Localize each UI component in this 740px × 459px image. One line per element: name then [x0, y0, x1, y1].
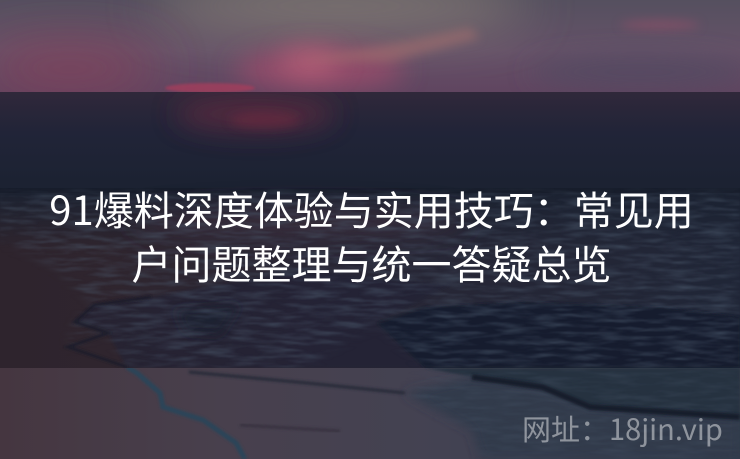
title: 户问题整理与统一答疑总览	[132, 233, 612, 291]
shoreline waves	[0, 188, 740, 368]
title	[49, 179, 694, 291]
title: 91爆料深度体验与实用技巧：常见用	[49, 179, 694, 237]
dark water below the horizon	[0, 92, 740, 146]
sky	[0, 0, 740, 93]
watermark url: 网址：18jin.vip	[522, 407, 723, 449]
wet sand foreground	[0, 367, 740, 459]
